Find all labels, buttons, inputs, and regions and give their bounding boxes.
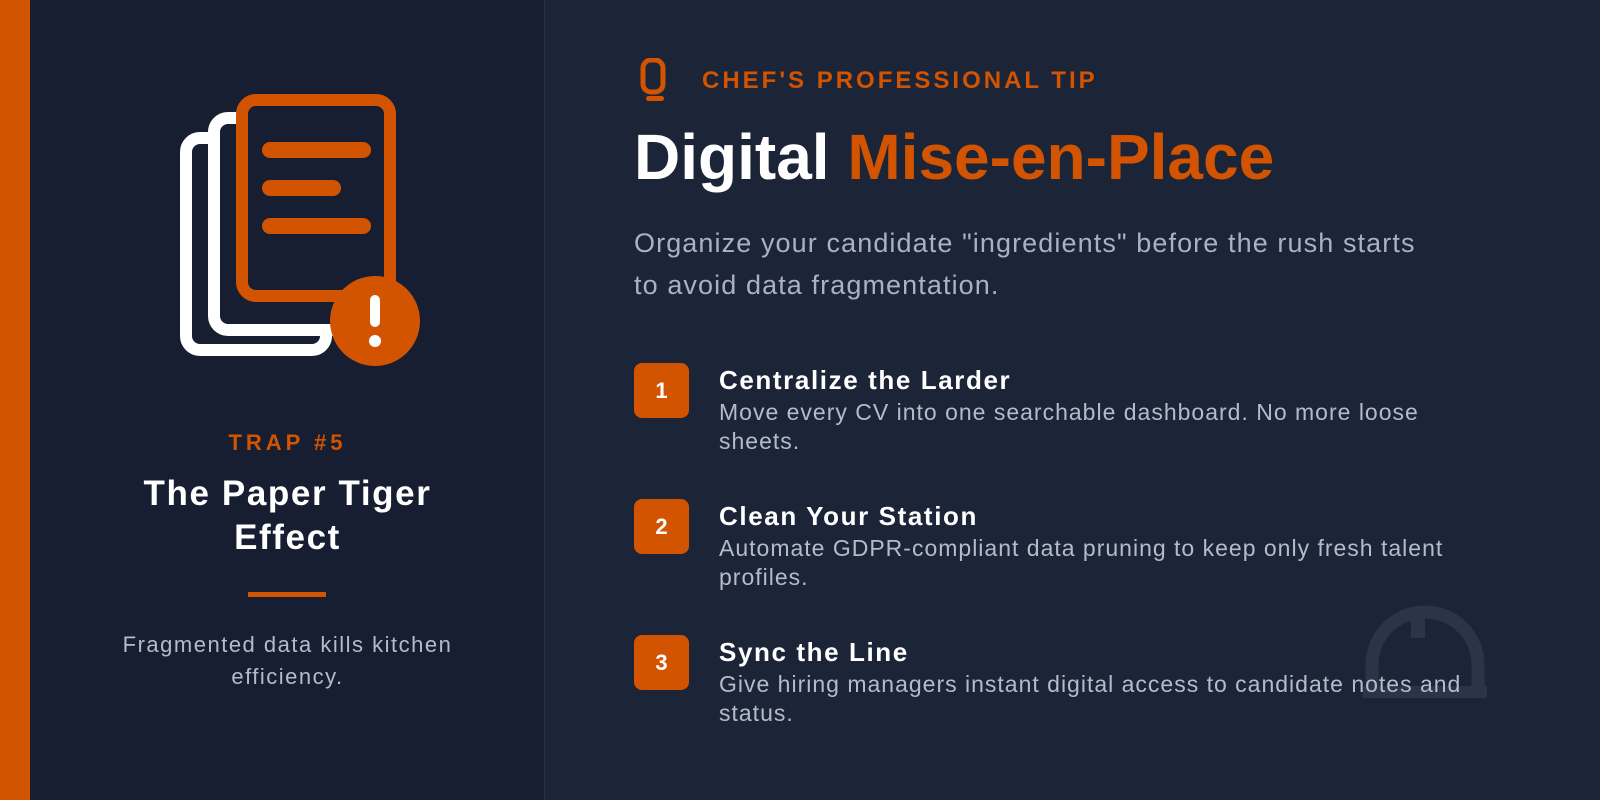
step 3: Sync the Line <box>719 637 909 667</box>
trap title: The Paper Tiger <box>144 474 431 513</box>
trap label: TRAP #5 <box>228 430 347 455</box>
eyebrow: chef's tip: CHEF'S PROFESSIONAL TIP <box>702 67 1098 94</box>
trap title <box>144 474 431 557</box>
step 1: Centralize the Larder <box>719 365 1011 395</box>
subtitle: Organize your candidate "ingredients" before the rush starts <box>634 228 1416 258</box>
step 2: profiles. <box>719 564 809 590</box>
step 3: status. <box>719 700 794 726</box>
watermark: chef hat <box>1363 606 1487 698</box>
step 1: Move every CV into one searchable dashboard. No more loose <box>719 399 1419 425</box>
icon: chef tool <box>640 58 666 101</box>
step 2: Automate GDPR-compliant data pruning to keep only fresh talent <box>719 535 1443 561</box>
divider <box>248 592 326 597</box>
step 1: sheets. <box>719 428 800 454</box>
main title: Digital Mise-en-Place <box>634 121 1274 193</box>
step 1 <box>634 363 1419 454</box>
subtitle: to avoid data fragmentation. <box>634 270 1000 300</box>
step 2 <box>634 499 1443 590</box>
trap title: Effect <box>234 518 341 557</box>
icon: documents with warning <box>180 94 420 366</box>
step 3 <box>634 635 1461 726</box>
step 3: 3 <box>655 650 668 675</box>
step 2: Clean Your Station <box>719 501 978 531</box>
step 3: Give hiring managers instant digital access to candidate notes and <box>719 671 1461 697</box>
panel: trap <box>30 0 545 800</box>
step 2: 2 <box>655 514 668 539</box>
trap description: efficiency. <box>231 664 344 689</box>
step 1: 1 <box>655 378 668 403</box>
trap description <box>123 632 452 689</box>
subtitle <box>634 228 1416 300</box>
accent stripe <box>0 0 30 800</box>
trap description: Fragmented data kills kitchen <box>123 632 452 657</box>
eyebrow: chef's tip <box>640 58 1098 101</box>
